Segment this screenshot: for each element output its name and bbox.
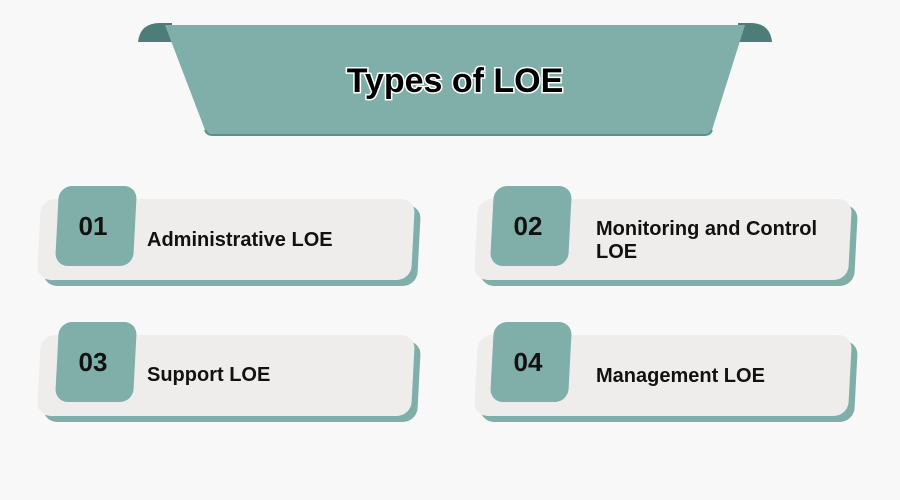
card 01: 01	[79, 211, 107, 241]
card 04: 04	[514, 347, 542, 377]
card 01: Administrative LOE	[147, 229, 333, 251]
card 02: 02	[514, 211, 542, 241]
card 02: Monitoring and Control	[596, 218, 817, 240]
title: Types of LOE	[347, 62, 563, 100]
card 01	[38, 186, 420, 286]
title banner	[138, 23, 772, 136]
card 04	[474, 322, 858, 422]
card 02	[474, 186, 858, 286]
card 03: 03	[79, 347, 107, 377]
card 03: Support LOE	[147, 364, 270, 386]
card 03	[38, 322, 420, 422]
card 04: Management LOE	[596, 365, 765, 387]
card 02: LOE	[596, 241, 637, 263]
